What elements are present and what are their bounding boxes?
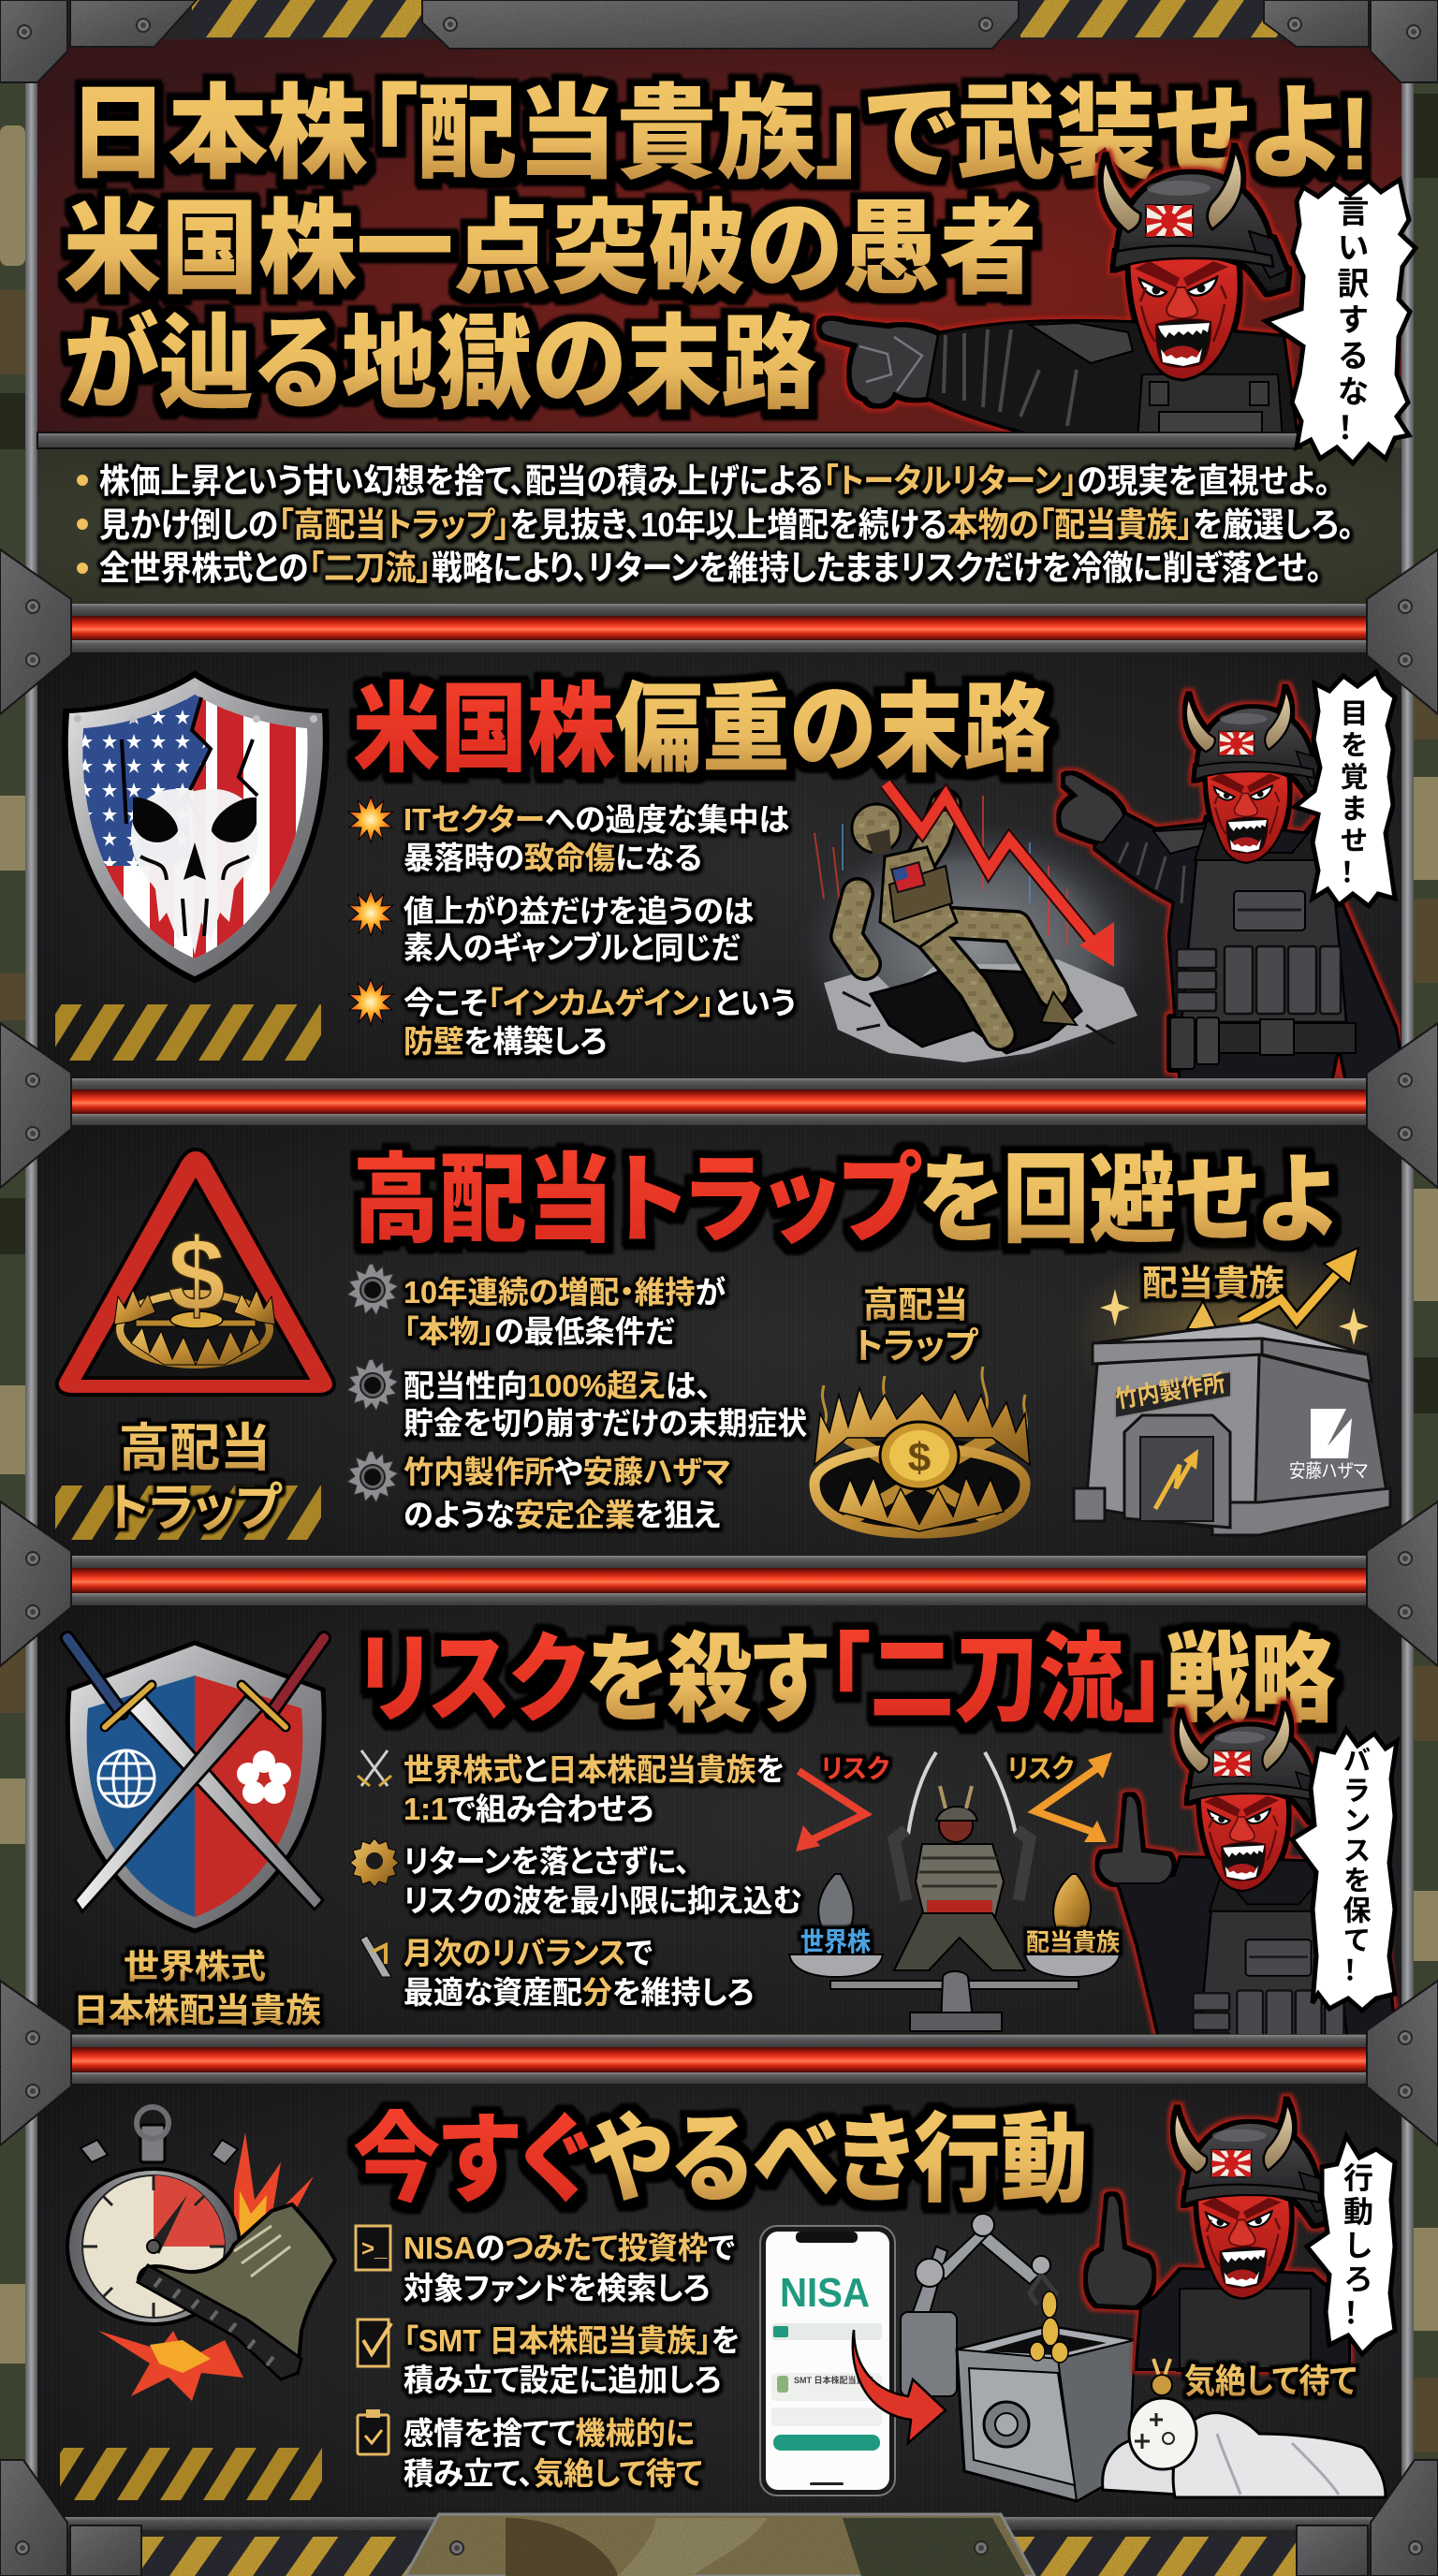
list: 暴落時の致命傷になる <box>404 841 702 875</box>
panel: summary bullets <box>37 432 1401 607</box>
title: 米国株一点突破の愚者 <box>64 192 1037 307</box>
panel: section 2 高配当トラップを回避せよ <box>37 1125 1401 1556</box>
illustration: dividend aristocrat bunker: 安藤ハザマ <box>1289 1460 1368 1482</box>
list: 10年連続の増配・維持が <box>404 1275 726 1310</box>
oni soldier with raised finger <box>1099 1706 1395 2103</box>
list: のような安定企業を狙え <box>404 1498 721 1532</box>
bottom bar <box>0 2460 1438 2576</box>
label: 高配当トラップ: トラップ <box>108 1479 282 1537</box>
illustration: soldier falling into crack with crashing arrow <box>796 783 1152 1072</box>
panel: section 1 米国株偏重の末路 <box>37 652 1404 1086</box>
list <box>350 1750 802 2010</box>
icon: cracked US shield with skull <box>66 676 325 978</box>
list: >_ <box>361 2236 388 2261</box>
list: 積み立て、気絶して待て <box>404 2456 702 2491</box>
illustration: dividend aristocrat bunker: 竹内製作所 <box>1113 1368 1226 1413</box>
speech bubble: バランスを保て！ <box>1339 1746 1371 1985</box>
list <box>356 2226 740 2491</box>
heading: 米国株偏重の末路 <box>353 676 1050 784</box>
illustration: smartphone NISA app: NISA <box>780 2270 870 2316</box>
illustration: passed-out coin under blanket <box>1103 2398 1386 2497</box>
label: 気絶して待て: 気絶して待て <box>1184 2362 1357 2400</box>
list: 値上がり益だけを追うのは <box>404 894 754 929</box>
side plates at dividers <box>0 549 1438 2145</box>
list <box>347 1264 807 1532</box>
list: 1:1で組み合わせろ <box>404 1792 653 1826</box>
panel: header title <box>37 39 1401 440</box>
list: 「本物」の最低条件だ <box>404 1314 675 1349</box>
panel: section 3 リスクを殺す「二刀流」戦略 <box>37 1605 1401 2103</box>
list <box>348 797 796 1059</box>
oni soldier with raised finger <box>1087 2103 1348 2368</box>
illustration: samurai balancing on a scale: リスク <box>1007 1754 1074 1783</box>
illustration: robotic arm and safe <box>853 2214 1135 2501</box>
list: 素人のギャンブルと同じだ <box>404 930 741 965</box>
list: ITセクターへの過度な集中は <box>404 802 789 837</box>
list: 竹内製作所や安藤ハザマ <box>404 1455 730 1489</box>
hazard stripes block <box>55 1004 321 1061</box>
illustration: high dividend trap: $ <box>908 1435 931 1481</box>
illustration: high dividend trap: 高配当 <box>863 1286 968 1325</box>
speech bubble: header: 言い訳するな！ <box>1332 195 1368 447</box>
bullet 1: 株価上昇という甘い幻想を捨て、配当の積み上げによる「トータルリターン」の現実を直視せよ。 <box>99 461 1330 500</box>
speech bubble: 目を覚ませ！ <box>1335 698 1367 889</box>
list: 積み立て設定に追加しろ <box>404 2363 721 2397</box>
list: 貯金を切り崩すだけの末期症状 <box>404 1406 807 1441</box>
title: 日本株「配当貴族」で武装せよ! <box>68 77 1372 192</box>
icon: dual sword shield <box>67 1638 324 1931</box>
speech bubble: header <box>1266 180 1416 463</box>
speech bubble <box>1295 672 1395 906</box>
illustration: dividend aristocrat bunker: 配当貴族 <box>1142 1265 1284 1304</box>
oni soldier pointing <box>1060 690 1404 1086</box>
list: 配当性向100%超えは、 <box>404 1368 712 1403</box>
heading: 高配当トラップを回避せよ <box>353 1147 1335 1255</box>
label: 高配当トラップ <box>55 1419 321 1540</box>
illustration: smartphone NISA app <box>760 2226 895 2496</box>
illustration: samurai balancing on a scale <box>789 1752 1120 2031</box>
bullet 2: 見かけ倒しの「高配当トラップ」を見抜き、10年以上増配を続ける本物の「配当貴族」を厳選しろ。 <box>99 505 1354 544</box>
heading: リスクを殺す「二刀流」戦略 <box>358 1626 1335 1734</box>
panel: section 4 今すぐやるべき行動 <box>37 2084 1401 2517</box>
illustration: dividend aristocrat bunker <box>1067 1240 1390 1535</box>
illustration: samurai balancing on a scale: 配当貴族 <box>1026 1928 1120 1956</box>
speech bubble <box>1292 1730 1397 2011</box>
icon: stopwatch crushed by a boot <box>67 2107 335 2401</box>
speech bubble <box>1307 2136 1395 2354</box>
illustration: smartphone NISA app: SMT 日本株配当貴族 <box>794 2375 873 2385</box>
label <box>73 1947 321 2029</box>
label: 高配当トラップ: 高配当 <box>119 1419 271 1477</box>
list: 防壁を構築しろ <box>404 1024 607 1059</box>
list: 最適な資産配分を維持しろ <box>404 1975 754 2010</box>
illustration: samurai balancing on a scale: 世界株 <box>800 1927 871 1956</box>
list: 今こそ「インカムゲイン」という <box>404 986 796 1020</box>
icon: warning triangle with gold trap <box>57 1149 334 1395</box>
label: 世界株式 <box>124 1947 266 1985</box>
list: 対象ファンドを検索しろ <box>404 2271 710 2305</box>
bullet 3: 全世界株式との「二刀流」戦略により、リターンを維持したままリスクだけを冷徹に削ぎ落とせ。 <box>99 549 1322 587</box>
heading: 今すぐやるべき行動 <box>353 2106 1088 2215</box>
neon divider bars <box>71 604 1367 2084</box>
list: 「SMT 日本株配当貴族」を <box>404 2323 740 2358</box>
title: が辿る地獄の末路 <box>64 307 816 422</box>
illustration: high dividend trap <box>814 1286 1030 1533</box>
oni soldier pointing <box>820 150 1297 440</box>
label: 日本株配当貴族 <box>73 1991 321 2029</box>
speech bubble: 行動しろ！ <box>1340 2162 1373 2331</box>
illustration: high dividend trap: トラップ <box>854 1327 979 1367</box>
hazard stripes block <box>60 2448 322 2500</box>
list: リターンを落とさずに、 <box>404 1844 690 1879</box>
list: 世界株式と日本株配当貴族を <box>404 1752 785 1787</box>
title <box>64 77 1372 422</box>
list: NISAのつみたて投資枠で <box>404 2231 735 2265</box>
list: リスクの波を最小限に抑え込む <box>404 1883 802 1918</box>
illustration: samurai balancing on a scale: リスク <box>821 1754 889 1783</box>
list: 感情を捨てて機械的に <box>404 2416 695 2451</box>
icon: warning triangle with gold trap: $ <box>168 1218 226 1333</box>
top bar <box>0 0 1438 82</box>
list: 月次のリバランスで <box>404 1936 653 1970</box>
